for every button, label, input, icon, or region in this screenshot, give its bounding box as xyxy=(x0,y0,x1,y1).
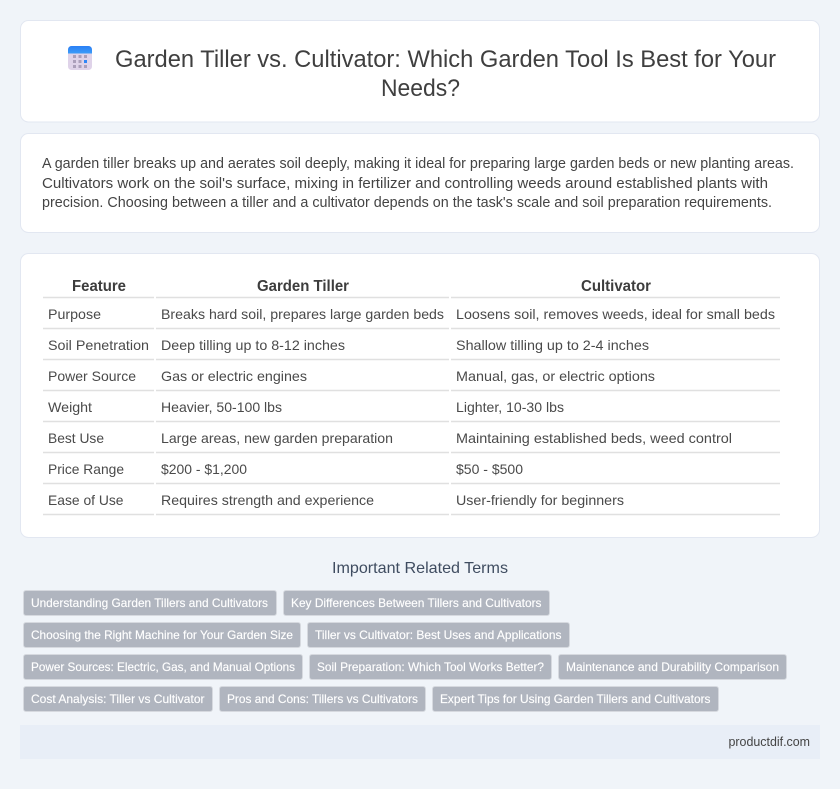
row: price range xyxy=(48,461,523,477)
table header xyxy=(72,278,651,295)
row: soil penetration: Soil Penetration xyxy=(48,337,149,353)
chip: Expert Tips for Using Garden Tillers and Cultivators xyxy=(440,692,710,706)
title: Needs? xyxy=(381,75,460,102)
row: best use xyxy=(48,430,732,446)
chip xyxy=(24,654,302,680)
chip: Soil Preparation: Which Tool Works Better? xyxy=(317,660,544,674)
row: purpose: Purpose xyxy=(48,306,101,322)
chip xyxy=(558,654,786,680)
row: price range: Price Range xyxy=(48,461,124,477)
chip xyxy=(308,622,570,648)
row: weight: Heavier, 50-100 lbs xyxy=(161,399,282,415)
row: weight: Weight xyxy=(48,399,92,415)
row: price range: $200 - $1,200 xyxy=(161,461,247,477)
row: power source: Gas or electric engines xyxy=(161,368,307,384)
chip xyxy=(220,686,426,712)
heading: important related terms: Important Related Terms xyxy=(332,560,508,577)
chip xyxy=(284,590,550,616)
intro text: precision. Choosing between a tiller and a cultivator depends on the task's scale and soil preparation requirements. xyxy=(42,195,772,211)
chip: Key Differences Between Tillers and Cultivators xyxy=(291,596,542,610)
intro text: Cultivators work on the soil's surface, mixing in fertilizer and controlling weeds around established plants with xyxy=(42,176,768,192)
chip: Choosing the Right Machine for Your Garden Size xyxy=(31,628,293,642)
chip xyxy=(24,622,300,648)
icon: calendar xyxy=(68,46,92,70)
table header: Feature xyxy=(72,278,126,295)
row: weight xyxy=(48,399,564,415)
panel: title header xyxy=(20,20,820,122)
title xyxy=(115,46,776,102)
chip: Maintenance and Durability Comparison xyxy=(566,660,779,674)
chip: Pros and Cons: Tillers vs Cultivators xyxy=(227,692,418,706)
row: best use: Large areas, new garden preparation xyxy=(161,430,393,446)
row: purpose: Breaks hard soil, prepares large garden beds xyxy=(161,306,444,322)
row: soil penetration xyxy=(48,337,649,353)
intro text xyxy=(42,156,794,211)
intro text: A garden tiller breaks up and aerates soil deeply, making it ideal for preparing large garden beds or new planting areas. xyxy=(42,156,794,172)
panel: introduction xyxy=(20,134,820,232)
related term chips xyxy=(24,590,786,712)
chip xyxy=(310,654,552,680)
row: power source: Power Source xyxy=(48,368,136,384)
row: ease of use: Requires strength and experience xyxy=(161,492,374,508)
row: ease of use: User-friendly for beginners xyxy=(456,492,624,508)
footer bar: productdif.com xyxy=(728,734,810,749)
table header: Garden Tiller xyxy=(257,278,349,295)
chip: Understanding Garden Tillers and Cultivators xyxy=(31,596,268,610)
row: purpose xyxy=(48,306,775,322)
footer bar xyxy=(20,725,820,759)
row: soil penetration: Deep tilling up to 8-12 inches xyxy=(161,337,345,353)
chip xyxy=(432,686,718,712)
row: best use: Maintaining established beds, weed control xyxy=(456,430,732,446)
row: power source: Manual, gas, or electric options xyxy=(456,368,655,384)
panel: comparison table xyxy=(20,254,820,538)
row: power source xyxy=(48,368,655,384)
row: ease of use xyxy=(48,492,624,508)
row: best use: Best Use xyxy=(48,430,104,446)
chip xyxy=(24,686,212,712)
table header: Cultivator xyxy=(581,278,651,295)
chip: Power Sources: Electric, Gas, and Manual Options xyxy=(31,660,295,674)
title: Garden Tiller vs. Cultivator: Which Garden Tool Is Best for Your xyxy=(115,46,776,73)
row: purpose: Loosens soil, removes weeds, ideal for small beds xyxy=(456,306,775,322)
chip: Tiller vs Cultivator: Best Uses and Applications xyxy=(315,628,562,642)
row: soil penetration: Shallow tilling up to 2-4 inches xyxy=(456,337,649,353)
chip xyxy=(24,590,276,616)
row: ease of use: Ease of Use xyxy=(48,492,124,508)
row: price range: $50 - $500 xyxy=(456,461,523,477)
chip: Cost Analysis: Tiller vs Cultivator xyxy=(31,692,205,706)
row: weight: Lighter, 10-30 lbs xyxy=(456,399,564,415)
